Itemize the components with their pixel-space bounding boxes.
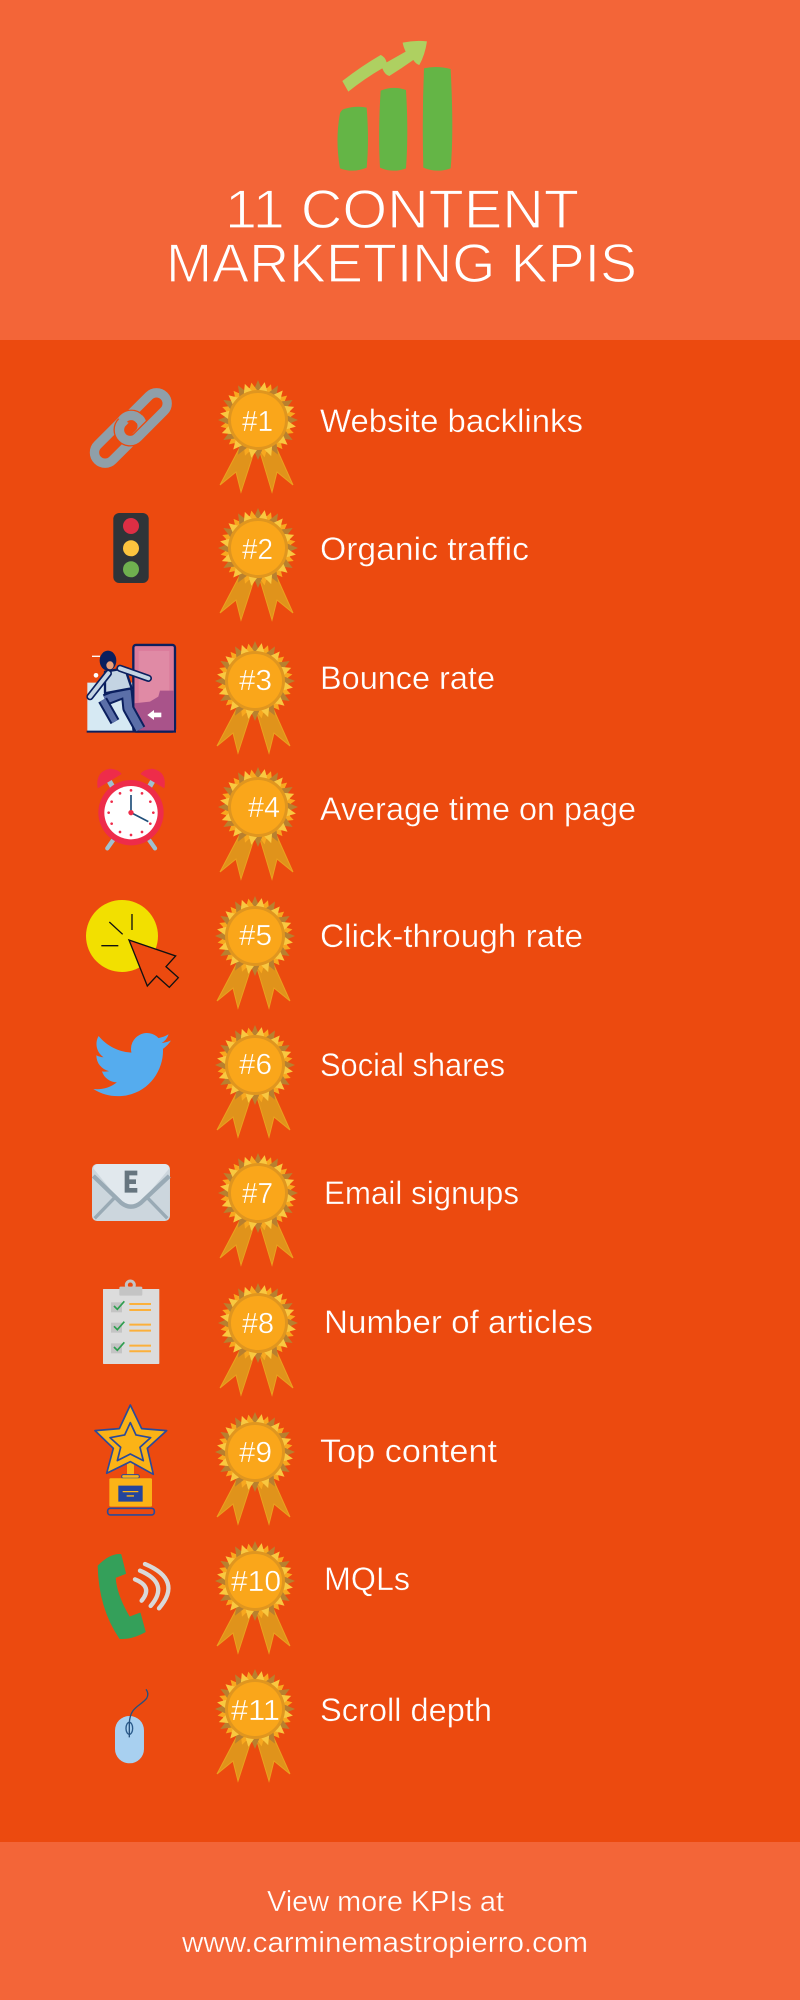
badge #4 xyxy=(215,764,301,879)
icon: clipboard checklist xyxy=(103,1281,159,1364)
row 6: social shares xyxy=(93,1022,505,1137)
label: Number of articles xyxy=(324,1304,593,1340)
icon: computer mouse xyxy=(115,1689,148,1763)
row 10: MQLs xyxy=(98,1538,410,1653)
label: Website backlinks xyxy=(320,403,583,439)
number 2: #2 xyxy=(242,534,273,566)
main background panel xyxy=(0,340,800,1842)
badge #6 xyxy=(212,1022,298,1137)
badge #10 xyxy=(212,1538,298,1653)
number 6: #6 xyxy=(239,1049,272,1081)
icon: envelope xyxy=(92,1164,170,1221)
number 5: #5 xyxy=(239,920,272,952)
label: Organic traffic xyxy=(320,531,529,567)
icon: star trophy xyxy=(95,1405,167,1515)
icon: ringing phone xyxy=(98,1555,168,1638)
badge #7 xyxy=(215,1150,301,1265)
badge #3 xyxy=(212,638,298,753)
header panel xyxy=(0,0,800,340)
row 11: scroll depth xyxy=(115,1666,492,1781)
number 8: #8 xyxy=(242,1308,274,1340)
row 8: number of articles xyxy=(103,1280,593,1395)
number 3: #3 xyxy=(239,665,272,697)
number 11: #11 xyxy=(231,1695,280,1727)
footer line 2: url: www.carminemastropierro.com xyxy=(181,1927,588,1959)
row 4: average time on page xyxy=(97,764,636,879)
number 4: #4 xyxy=(248,792,280,824)
title line 2: MARKETING KPIS xyxy=(166,232,637,294)
icon: chain link xyxy=(90,388,172,468)
label: Click-through rate xyxy=(320,918,583,954)
row 2: organic traffic xyxy=(113,505,529,620)
badge #2 xyxy=(215,505,301,620)
badge #9 xyxy=(212,1409,298,1524)
label: Bounce rate xyxy=(320,660,495,696)
number 7: #7 xyxy=(242,1178,273,1210)
row 3: bounce rate xyxy=(87,638,495,753)
icon: person leaving through door xyxy=(87,645,176,733)
row 1: website backlinks xyxy=(90,377,583,492)
row 7: email signups xyxy=(92,1150,519,1265)
label: Scroll depth xyxy=(320,1692,492,1728)
footer panel xyxy=(0,1842,800,2000)
badge #8 xyxy=(215,1280,301,1395)
label: Top content xyxy=(320,1433,497,1469)
icon: alarm clock xyxy=(97,769,165,848)
title line 1: 11 CONTENT xyxy=(225,178,579,240)
icon: traffic light xyxy=(113,513,149,583)
badge #1 xyxy=(215,377,301,492)
icon: growth bar chart with arrow xyxy=(337,41,452,171)
number 10: #10 xyxy=(231,1566,281,1598)
icon: twitter bird xyxy=(93,1033,171,1096)
row 9: top content xyxy=(95,1405,497,1524)
label: Social shares xyxy=(320,1047,505,1083)
footer line 1: View more KPIs at xyxy=(267,1886,504,1918)
label: MQLs xyxy=(324,1561,410,1597)
row 5: click-through rate xyxy=(86,893,583,1008)
number 9: #9 xyxy=(239,1437,272,1469)
badge #5 xyxy=(212,893,298,1008)
label: Email signups xyxy=(324,1175,519,1211)
badge #11 xyxy=(212,1666,298,1781)
icon: yellow circle with cursor xyxy=(86,900,178,987)
label: Average time on page xyxy=(320,791,636,827)
number 1: #1 xyxy=(242,406,273,438)
